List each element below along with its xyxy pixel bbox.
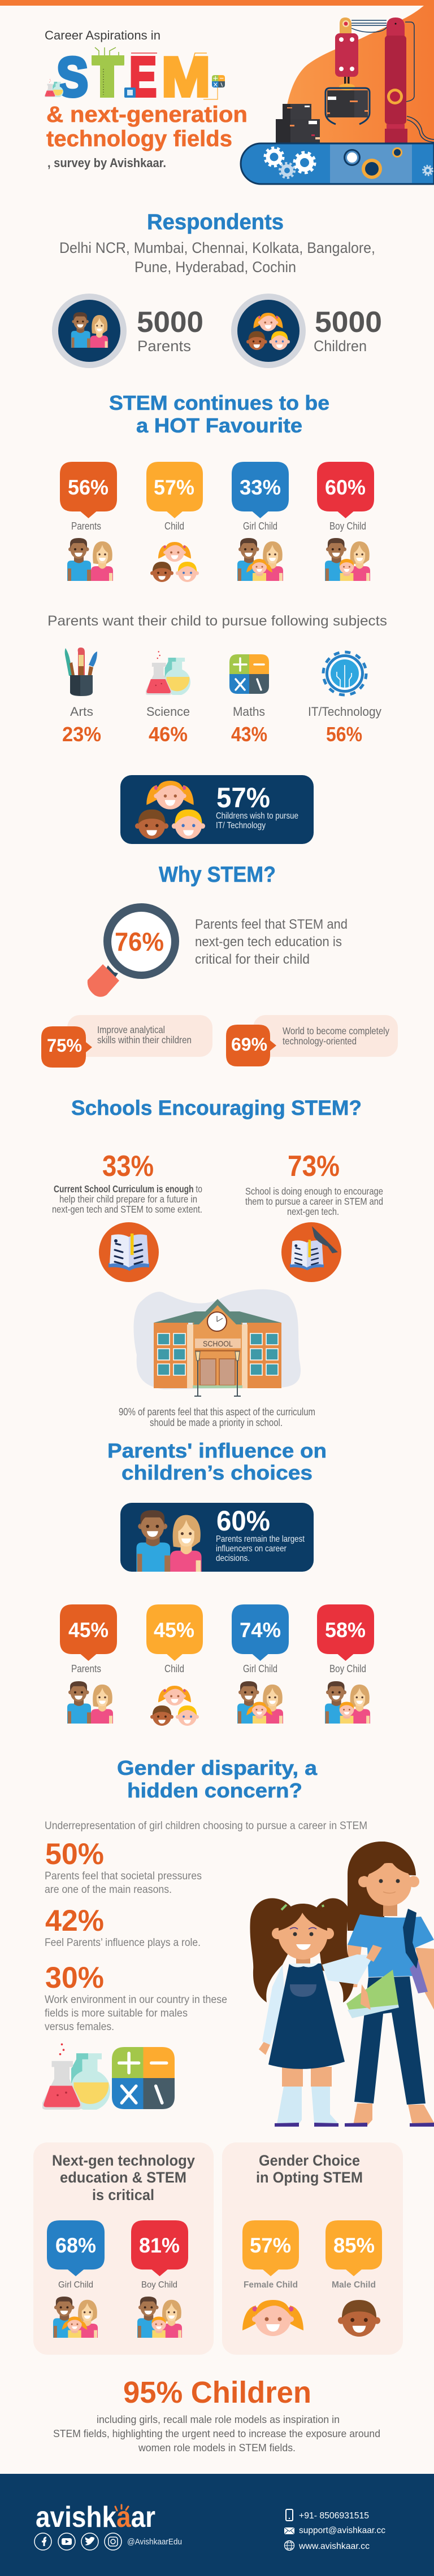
callout: 57% children: Childrens wish to pursue bbox=[216, 811, 298, 821]
panel heading: education & STEM bbox=[60, 2169, 186, 2186]
bubble: girl child 68%: 68% bbox=[55, 2234, 96, 2257]
bubble: girl child 33% bbox=[232, 462, 289, 581]
subject: IT/Technology: 56% bbox=[326, 723, 362, 746]
panel: next-gen technology education bbox=[33, 2142, 214, 2355]
subheading: next-generation: & next-generation bbox=[46, 102, 248, 127]
caption: 90% bbox=[119, 1406, 315, 1428]
stat: 50% bbox=[45, 1838, 202, 1896]
big stat: 95% Children bbox=[123, 2376, 311, 2409]
paragraph: women role models in STEM fields. bbox=[138, 2442, 296, 2453]
STEM wordmark: S bbox=[57, 46, 88, 108]
cities: Delhi NCR, Mumbai, Chennai, Kolkata, Bangalore, bbox=[59, 239, 375, 256]
subheading: Parents want their child to pursue following subjects bbox=[47, 613, 387, 629]
callout: 60% bbox=[120, 1503, 314, 1572]
bubble: male child 85%: Male Child bbox=[332, 2280, 376, 2290]
illustration: tall girl bbox=[345, 1842, 434, 2127]
stat: 50%: are one of the main reasons. bbox=[45, 1884, 172, 1896]
bubble: boy child 60% bbox=[317, 462, 374, 581]
bubble: boy child 60%: 60% bbox=[325, 476, 366, 499]
tall arm bbox=[385, 18, 407, 143]
stacked boxes bbox=[276, 104, 320, 143]
bubble: child 45% bbox=[146, 1604, 203, 1726]
stat: parents: 5000 bbox=[137, 306, 203, 339]
section: respondents bbox=[52, 210, 382, 368]
panel heading: is critical bbox=[92, 2186, 154, 2203]
callout: 60%: 60% bbox=[216, 1505, 270, 1537]
contact: web: www.avishkaar.cc bbox=[298, 2542, 370, 2551]
STEM wordmark: M bbox=[162, 46, 210, 108]
robot factory illustration bbox=[241, 6, 434, 184]
paragraph: STEM fields, highlighting the urgent need to increase the exposure around bbox=[53, 2428, 380, 2439]
subject: maths: Maths bbox=[233, 705, 265, 719]
heading: STEM continues to be bbox=[109, 391, 329, 414]
callout: 60%: decisions. bbox=[216, 1554, 250, 1563]
callout: 60%: Parents remain the largest bbox=[216, 1534, 305, 1544]
stat: 33%: 33% bbox=[102, 1150, 154, 1183]
callout: 57% children: IT/ Technology bbox=[216, 821, 266, 830]
paragraph: including girls, recall male role models as inspiration in bbox=[97, 2413, 340, 2425]
survey credit: , survey by Avishkaar. bbox=[47, 156, 166, 170]
claw with box bbox=[326, 88, 370, 124]
cities: Pune, Hyderabad, Cochin bbox=[134, 259, 296, 275]
bubble: boy child 81%: Boy Child bbox=[141, 2280, 177, 2290]
bubble: girl child 74%: Girl Child bbox=[243, 1663, 277, 1674]
bubble: child 45%: Child bbox=[164, 1663, 184, 1674]
bubble: boy child 58%: Boy Child bbox=[329, 1663, 366, 1674]
illustration: small girl bbox=[250, 1898, 382, 2127]
text: parents feel: Parents feel that STEM and bbox=[195, 917, 348, 932]
stat: children: Children bbox=[314, 338, 367, 355]
stat: parents: Parents bbox=[137, 338, 191, 355]
text: parents feel: next-gen tech education is bbox=[195, 934, 342, 950]
bubble: boy child 58%: 58% bbox=[325, 1619, 366, 1642]
stat: 33% bbox=[52, 1150, 202, 1282]
bubble: boy child 81% bbox=[131, 2220, 188, 2338]
heading: a HOT Favourite bbox=[136, 414, 302, 437]
icon: mini flasks bbox=[45, 79, 63, 98]
panel heading bbox=[52, 2152, 195, 2203]
bubble: parents 45% bbox=[60, 1604, 117, 1724]
illustration: school building bbox=[134, 1289, 301, 1396]
caption: 90%: 90% of parents feel that this aspect of the curriculum bbox=[119, 1406, 315, 1418]
section: STEM hot favourite bbox=[60, 391, 374, 582]
stat: 30% bbox=[45, 1961, 227, 2033]
bubble: child 45%: 45% bbox=[154, 1619, 194, 1642]
stat: 30%: Work environment in our country in these bbox=[45, 1994, 227, 2006]
subject: IT/Technology: IT/Technology bbox=[308, 705, 381, 719]
stat: 50%: Parents feel that societal pressures bbox=[45, 1870, 202, 1882]
stat: 42%: 42% bbox=[45, 1904, 104, 1938]
subject: science: Science bbox=[146, 705, 190, 719]
subject: arts bbox=[62, 648, 101, 746]
callout: 57% children bbox=[120, 775, 314, 844]
bubble: female child 57%: Female Child bbox=[244, 2280, 298, 2290]
short arm bbox=[335, 18, 358, 90]
subject: arts: Arts bbox=[70, 705, 93, 719]
paragraph bbox=[53, 2413, 380, 2453]
stat: 33%: next-gen tech and STEM to some extent. bbox=[52, 1204, 202, 1215]
social handle: @AvishkaarEdu bbox=[127, 2537, 182, 2547]
bubble: girl child 33%: 33% bbox=[240, 476, 281, 499]
card: 75%: 75% bbox=[47, 1035, 82, 1056]
panel: gender choice bbox=[222, 2142, 403, 2355]
bubble: child 57% bbox=[146, 462, 203, 582]
heading: children’s choices bbox=[121, 1461, 313, 1484]
stat: 42%: Feel Parents’ influence plays a role. bbox=[45, 1937, 201, 1949]
panel heading: Gender Choice bbox=[259, 2152, 360, 2169]
footer bbox=[0, 2474, 434, 2576]
top bar bbox=[0, 0, 434, 6]
heading bbox=[117, 1756, 318, 1802]
orange blob bbox=[283, 6, 434, 143]
subject: arts: 23% bbox=[62, 723, 101, 746]
callout: 60%: influencers on career bbox=[216, 1544, 287, 1554]
card: 69% bbox=[226, 1015, 398, 1066]
icon: chip bbox=[124, 88, 136, 98]
card: 75%: skills within their children bbox=[97, 1034, 192, 1046]
stat: 33%: help their child prepare for a future in bbox=[59, 1193, 197, 1205]
bubble: parents 45%: Parents bbox=[71, 1663, 101, 1674]
stat: 73%: School is doing enough to encourage bbox=[245, 1186, 383, 1197]
stat: 73% bbox=[245, 1150, 383, 1282]
bubble: male child 85% bbox=[326, 2220, 382, 2337]
stat: children bbox=[231, 294, 382, 368]
bubble: parents 56% bbox=[60, 462, 117, 581]
subject: science bbox=[145, 651, 190, 746]
section: parents' influence bbox=[60, 1439, 374, 1726]
section: 95% children bbox=[53, 2376, 380, 2453]
social icons bbox=[34, 2533, 121, 2550]
icon: flasks and math bbox=[42, 2043, 175, 2111]
bubble: boy child 60%: Boy Child bbox=[329, 521, 366, 532]
stat: 30%: fields is more suitable for males bbox=[45, 2008, 188, 2019]
section: gender disparity bbox=[42, 1756, 434, 2127]
subject: science: 46% bbox=[149, 723, 188, 746]
intro line: Underrepresentation of girl children choosing to pursue a career in STEM bbox=[45, 1820, 367, 1832]
text: parents feel: critical for their child bbox=[195, 952, 310, 967]
stat: 33%: Current School Curriculum is enough to bbox=[54, 1183, 202, 1195]
panel heading: in Opting STEM bbox=[256, 2169, 363, 2186]
stat: 73%: next-gen tech. bbox=[287, 1206, 339, 1217]
heading bbox=[109, 391, 329, 437]
panel heading bbox=[256, 2152, 363, 2186]
heading: Schools Encouraging STEM? bbox=[71, 1096, 362, 1119]
icon: magnifier 76% bbox=[88, 903, 179, 997]
subject: maths bbox=[229, 654, 269, 746]
subject: maths: 43% bbox=[231, 723, 267, 746]
bubble: child 57%: 57% bbox=[154, 476, 194, 499]
conveyor belt bbox=[241, 143, 434, 184]
bubble: female child 57% bbox=[242, 2220, 303, 2336]
subheading: technology fields: technology fields bbox=[46, 126, 232, 151]
stat: children: 5000 bbox=[315, 306, 382, 339]
bubble: girl child 68%: Girl Child bbox=[58, 2280, 93, 2290]
title block bbox=[45, 28, 248, 170]
contact: email: support@avishkaar.cc bbox=[299, 2526, 385, 2535]
stat: 42% bbox=[45, 1904, 201, 1949]
section: subjects bbox=[47, 613, 387, 746]
bubble: male child 85%: 85% bbox=[333, 2234, 375, 2257]
STEM wordmark: T bbox=[93, 46, 123, 108]
contact: phone: +91- 8506931515 bbox=[299, 2511, 369, 2521]
icon: mini math bbox=[212, 75, 225, 88]
stat: 30%: versus females. bbox=[45, 2021, 114, 2033]
heading: career aspirations: Career Aspirations in bbox=[45, 28, 160, 42]
stat: 50%: 50% bbox=[45, 1838, 104, 1871]
bubble: parents 56%: Parents bbox=[71, 521, 101, 532]
caption: 90%: should be made a priority in school. bbox=[150, 1417, 283, 1428]
card: 75% bbox=[41, 1015, 212, 1068]
bubble: parents 45%: 45% bbox=[68, 1619, 108, 1642]
heading: Respondents bbox=[147, 210, 284, 234]
heading: Why STEM? bbox=[159, 863, 276, 887]
card: 69%: 69% bbox=[231, 1034, 267, 1055]
wires bbox=[351, 20, 434, 142]
card: 75%: Improve analytical bbox=[97, 1024, 165, 1035]
bubble: girl child 74% bbox=[232, 1604, 289, 1724]
heading: hidden concern? bbox=[127, 1779, 302, 1802]
bubble: child 57%: Child bbox=[164, 521, 184, 532]
bubble: parents 56%: 56% bbox=[68, 476, 108, 499]
STEM wordmark: E bbox=[129, 46, 157, 108]
icon: magnifier 76%: 76% bbox=[115, 927, 164, 956]
panel heading: Next-gen technology bbox=[52, 2152, 195, 2169]
card: 69%: technology-oriented bbox=[283, 1035, 357, 1047]
bubble: boy child 58% bbox=[317, 1604, 374, 1724]
illustration: school building: SCHOOL bbox=[203, 1339, 233, 1348]
stat: 73%: them to pursue a career in STEM and bbox=[245, 1196, 383, 1207]
STEM wordmark bbox=[57, 46, 218, 108]
bubble: girl child 74%: 74% bbox=[240, 1619, 281, 1642]
stat: 30%: 30% bbox=[45, 1961, 104, 1995]
bubble: boy child 81%: 81% bbox=[139, 2234, 180, 2257]
stat: parents bbox=[52, 294, 203, 368]
heading: Parents' influence on bbox=[107, 1439, 327, 1462]
subject: IT/Technology bbox=[308, 652, 381, 746]
card: 69%: World to become completely bbox=[283, 1025, 389, 1036]
cities bbox=[59, 239, 375, 275]
logo: avishkaar bbox=[36, 2501, 155, 2534]
heading: Gender disparity, a bbox=[117, 1756, 318, 1779]
bubble: female child 57%: 57% bbox=[250, 2234, 291, 2257]
bubble: girl child 33%: Girl Child bbox=[243, 521, 277, 532]
callout: 57% children: 57% bbox=[216, 782, 270, 814]
section: why STEM bbox=[41, 863, 398, 1068]
section: schools encouraging STEM bbox=[52, 1096, 383, 1428]
heading bbox=[107, 1439, 327, 1484]
bubble: girl child 68% bbox=[47, 2220, 105, 2338]
text: parents feel bbox=[195, 917, 348, 967]
stat: 73%: 73% bbox=[288, 1150, 340, 1183]
